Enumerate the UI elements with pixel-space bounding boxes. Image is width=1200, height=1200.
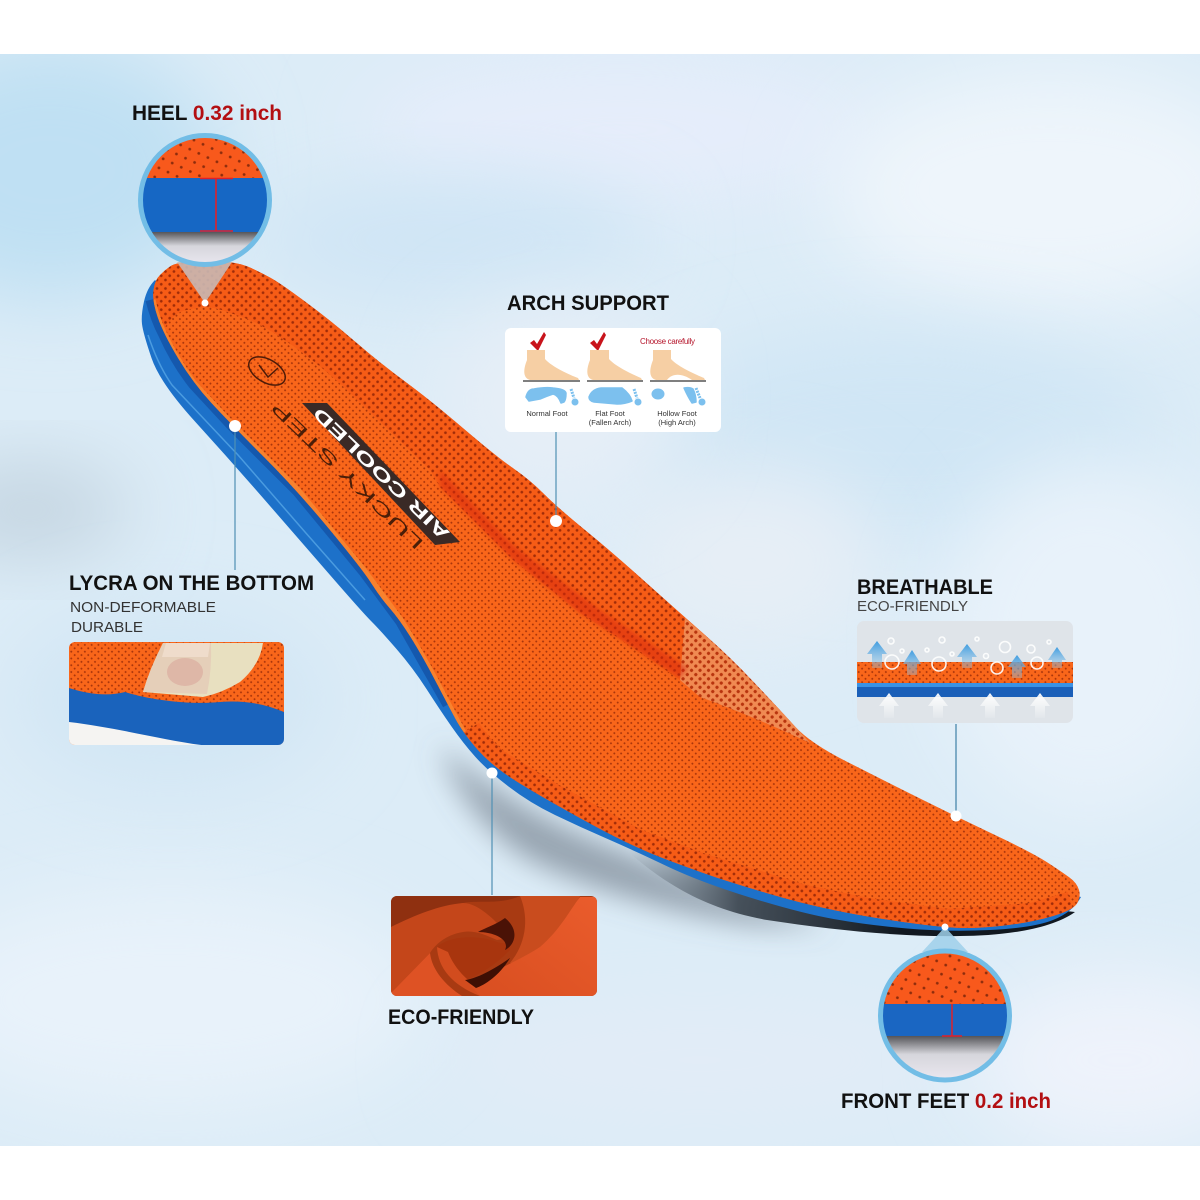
caption: choose carefully: Choose carefully: [640, 337, 695, 346]
diagram: blue up arrows: [867, 641, 1066, 678]
arch leader line: [555, 432, 557, 521]
icon: check marks: [530, 332, 606, 351]
lycra leader line: [234, 426, 236, 570]
lycra callout: [69, 420, 314, 747]
breathable callout: [857, 576, 1073, 822]
breathable diagram: [857, 621, 1073, 723]
foot: hollow: Hollow Foot: [657, 409, 698, 418]
insole: blue foam sole: [142, 280, 1081, 931]
insole: air cooled label: AIR COOLED: [309, 404, 453, 544]
arch point marker: [550, 515, 562, 527]
breathable point marker: [950, 810, 962, 822]
eco point marker: [486, 768, 498, 778]
lycra point marker: [229, 420, 241, 432]
insole: air cooled label: [302, 403, 460, 545]
breathable heading: BREATHABLE: [857, 576, 993, 599]
insole: orange top surface: [140, 250, 1090, 940]
diagram: mesh layer: [857, 662, 1073, 684]
insole: lighter knit near arch end: [680, 618, 810, 743]
lycra photo: [69, 642, 284, 747]
eco leader line: [491, 773, 493, 895]
diagram: foam layer: [857, 687, 1073, 697]
insole: check logo: [244, 351, 290, 391]
foot: flat: Flat Foot: [595, 409, 626, 418]
lycra subtext: NON-DEFORMABLE: [70, 599, 216, 616]
heel pointer: [177, 262, 232, 303]
insole: plain rim on the medial edge: [152, 300, 463, 733]
arch support card: [505, 328, 721, 432]
foot: flat: [587, 350, 643, 427]
eco-friendly callout: [388, 768, 597, 1029]
insole shadow on ground: [440, 745, 830, 925]
insole: lucky step logo: LUCKY STEP: [267, 398, 427, 553]
diagram: bubbles: [885, 637, 1051, 674]
insole: foam texture along heel side: [150, 300, 447, 705]
lycra subtext line two: DURABLE: [71, 619, 143, 636]
eco fabric photo: [391, 896, 597, 996]
foot: flat: (Fallen Arch): [589, 418, 632, 427]
foot: normal: [523, 350, 580, 418]
heel point marker: [202, 300, 208, 306]
insole: arch ridge: [440, 470, 688, 678]
diagram: white up arrows: [879, 693, 1050, 714]
eco heading: ECO-FRIENDLY: [388, 1006, 534, 1029]
front magnifier circle: [875, 950, 1015, 1082]
lycra heading: LYCRA ON THE BOTTOM: [69, 572, 314, 595]
front feet label: FRONT FEET 0.2 inch: [841, 1090, 1051, 1113]
breathable subtext: ECO-FRIENDLY: [857, 598, 968, 615]
foot: normal: Normal Foot: [526, 409, 569, 418]
insole: [140, 250, 1090, 940]
front point marker: [942, 924, 948, 930]
heel label: HEEL 0.32 inch: [132, 102, 282, 125]
foot: hollow: (High Arch): [658, 418, 696, 427]
heel magnifier circle: [135, 130, 275, 267]
front feet callout: [841, 924, 1051, 1113]
front pointer: [922, 927, 968, 952]
insole: heel cup and arch wall: [152, 260, 810, 743]
insole: coarse knit along lower forefoot edge: [463, 733, 1073, 928]
arch support heading: ARCH SUPPORT: [507, 292, 669, 315]
heel callout: [132, 102, 282, 306]
breathable leader line: [955, 724, 957, 815]
foot: hollow: [650, 350, 706, 427]
arch support callout: [505, 292, 721, 527]
insole: dark underside wedge: [620, 845, 1075, 936]
